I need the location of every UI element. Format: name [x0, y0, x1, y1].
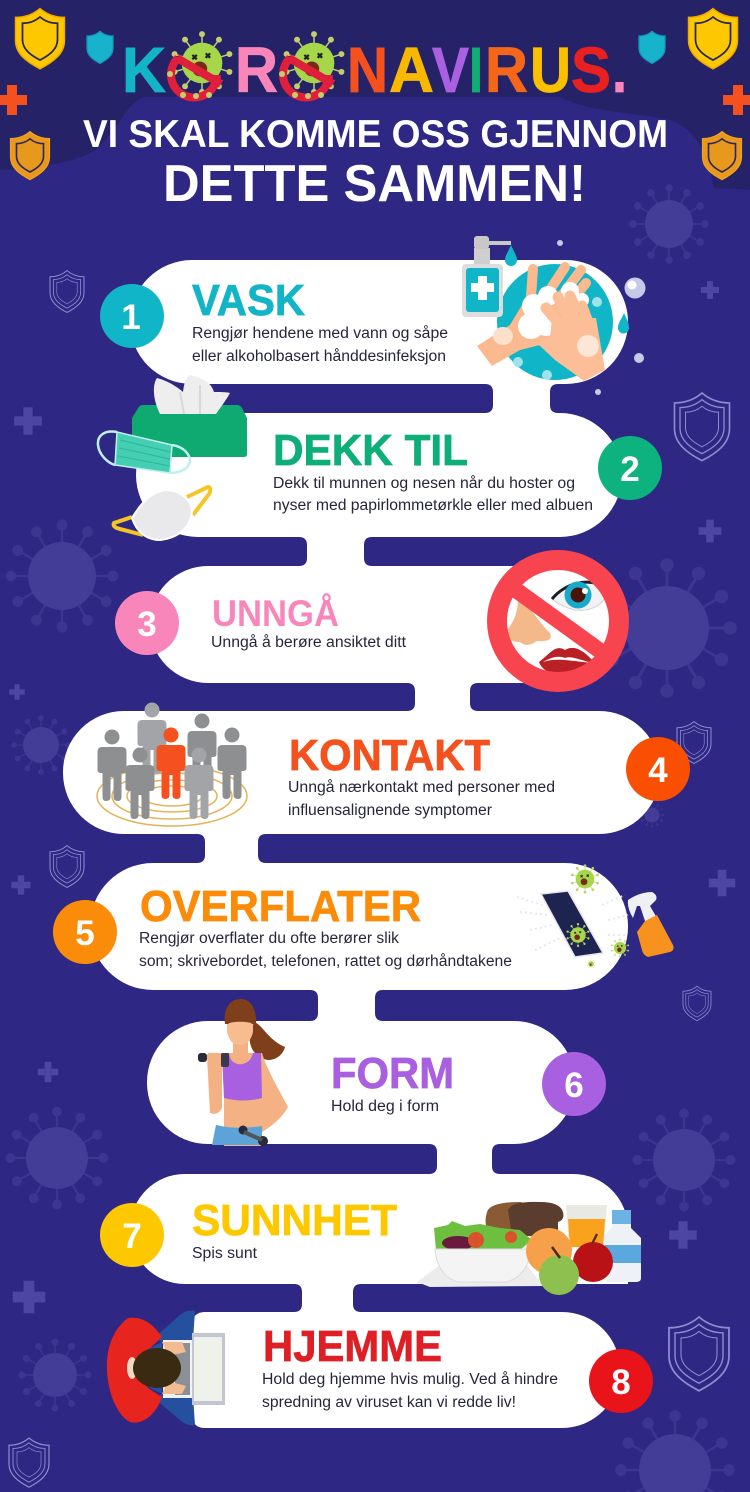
panel 2: DEKK TIL: [98, 375, 662, 540]
text VASK: eller alkoholbasert hånddesinfeksjon: [192, 348, 446, 365]
number badge 2: [598, 436, 662, 500]
white path: pills and connectors: [63, 260, 660, 1428]
number badge 3: [115, 591, 179, 655]
text DEKK TIL: nyser med papirlommetørkle eller med albuen: [273, 497, 593, 514]
title: S: [571, 34, 611, 106]
icon: healthy food: [417, 1202, 641, 1295]
number badge 1: [100, 284, 164, 348]
heading UNNGÅ: UNNGÅ: [212, 593, 339, 634]
icon: person at laptop from above: [107, 1310, 225, 1425]
header icons: shields and plus signs: [0, 9, 750, 180]
number badge 6: 6: [564, 1066, 584, 1105]
number badge 7: [100, 1203, 164, 1267]
icon: crossed-out virus 1: [167, 31, 233, 99]
text VASK: Rengjør hendene med vann og såpe: [192, 325, 448, 342]
subtitle line 2: DETTE SAMMEN!: [163, 155, 586, 213]
icon: hand washing: [462, 236, 646, 395]
text HJEMME: Hold deg hjemme hvis mulig. Ved å hindre: [262, 1371, 558, 1388]
panel 7: SUNNHET: [100, 1196, 641, 1295]
heading FORM: FORM: [331, 1049, 454, 1098]
text FORM: Hold deg i form: [331, 1098, 439, 1115]
title: R: [235, 34, 278, 106]
number badge 4: 4: [648, 751, 668, 790]
title: U: [530, 34, 571, 106]
icon: crossed-out virus 2: [279, 31, 345, 99]
heading DEKK TIL: DEKK TIL: [273, 426, 468, 475]
icon: phone, germs and spray bottle: [517, 864, 674, 968]
number badge 8: [589, 1349, 653, 1413]
text OVERFLATER: [139, 930, 512, 970]
number badge 7: 7: [122, 1217, 142, 1256]
subtitle line 1: VI SKAL KOMME OSS GJENNOM: [83, 113, 668, 156]
icon: do not touch face: [497, 560, 619, 682]
panel 4: KONTAKT: [97, 702, 690, 826]
text VASK: [192, 325, 448, 365]
number badge 1: 1: [121, 298, 141, 337]
panel 1: VASK: [100, 236, 646, 395]
number badge 8: 8: [611, 1363, 631, 1402]
text DEKK TIL: [273, 475, 593, 514]
title: K: [122, 34, 166, 106]
background crosses: [9, 281, 735, 1313]
text KONTAKT: influensalignende symptomer: [288, 802, 492, 819]
title: R: [485, 34, 528, 106]
panel 8: HJEMME: [107, 1310, 653, 1425]
icon: woman exercising: [198, 999, 288, 1146]
text KONTAKT: [288, 779, 555, 819]
text KONTAKT: Unngå nærkontakt med personer med: [288, 779, 555, 796]
heading SUNNHET: SUNNHET: [192, 1196, 397, 1245]
heading KONTAKT: KONTAKT: [289, 731, 490, 780]
background outline shields: [9, 271, 730, 1487]
title: .: [612, 34, 627, 106]
text DEKK TIL: Dekk til munnen og nesen når du hoster og: [273, 475, 575, 492]
text OVERFLATER: som; skrivebordet, telefonen, rattet og dørhåndtakene: [139, 953, 512, 970]
heading VASK: VASK: [192, 276, 305, 325]
title: [122, 31, 627, 106]
text UNNGÅ: Unngå å berøre ansiktet ditt: [211, 634, 407, 651]
text HJEMME: [262, 1371, 558, 1411]
icon: tissue box, mask, respirator: [98, 375, 247, 540]
panel 3: UNNGÅ: [115, 560, 619, 682]
text HJEMME: spredning av viruset kan vi redde liv!: [262, 1394, 516, 1411]
number badge 6: [542, 1052, 606, 1116]
text SUNNHET: Spis sunt: [192, 1245, 258, 1262]
number badge 5: 5: [75, 914, 95, 953]
text OVERFLATER: Rengjør overflater du ofte berører slik: [139, 930, 399, 947]
title: V: [432, 34, 469, 106]
icon: group of people on rings: [97, 702, 247, 826]
title: I: [469, 34, 483, 106]
top dark wave: [0, 0, 750, 190]
heading OVERFLATER: OVERFLATER: [140, 882, 421, 931]
number badge 2: 2: [620, 450, 640, 489]
number badge 4: [626, 737, 690, 801]
title: A: [389, 34, 434, 106]
number badge 5: [53, 900, 117, 964]
panel 5: OVERFLATER: [53, 864, 674, 970]
panel 6: FORM: [198, 999, 606, 1146]
title: N: [347, 34, 388, 106]
number badge 3: 3: [137, 605, 157, 644]
heading HJEMME: HJEMME: [263, 1322, 442, 1371]
